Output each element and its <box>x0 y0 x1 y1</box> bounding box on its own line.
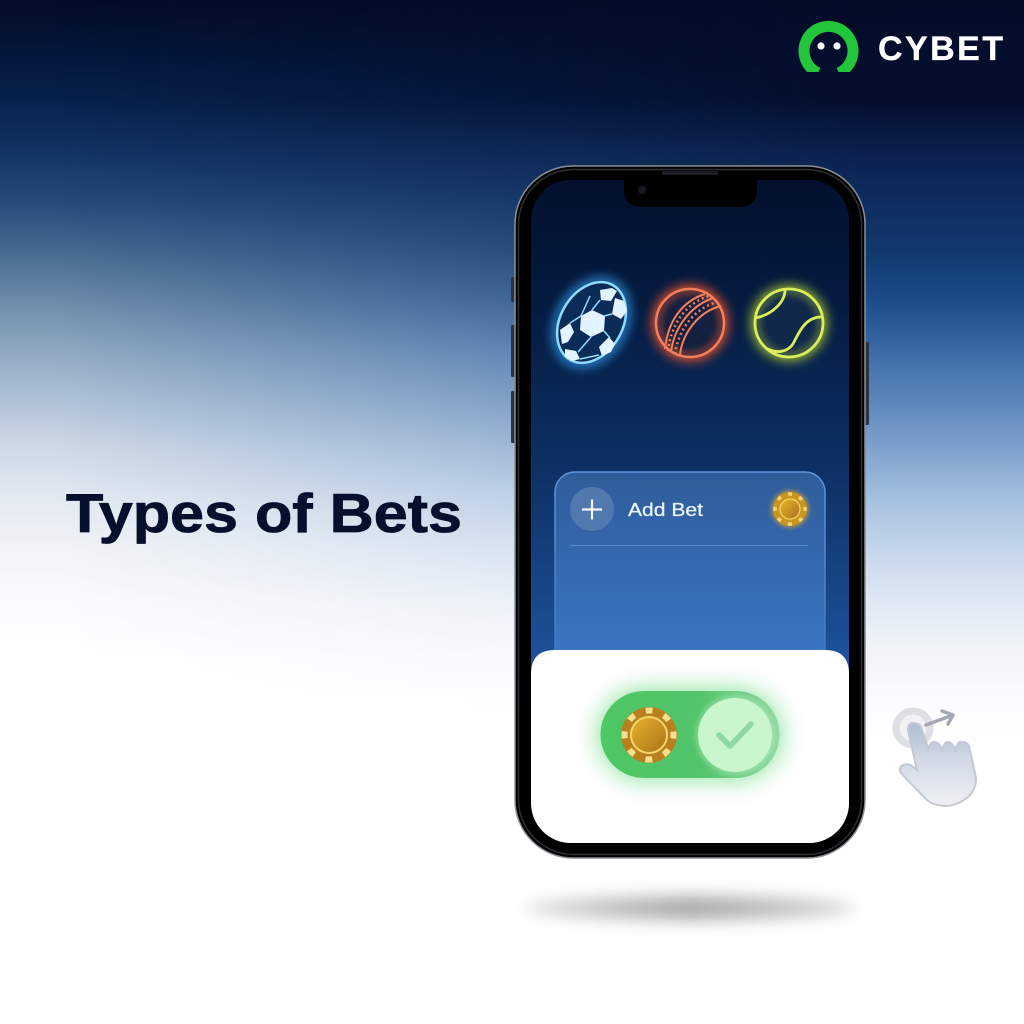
speaker <box>662 171 718 175</box>
icon: gold chip <box>621 707 677 763</box>
panel: white bottom sheet <box>531 650 849 843</box>
icon: small chip <box>771 490 809 528</box>
logo wordmark: CYBET <box>878 30 1003 68</box>
notch <box>624 178 757 207</box>
background gradient <box>0 0 1024 684</box>
camera <box>638 186 646 194</box>
title: Types of Bets <box>66 482 462 544</box>
icon: tennis ball <box>749 283 829 363</box>
phone body <box>515 166 865 858</box>
phone shadow <box>524 896 856 920</box>
icon: soccer ball <box>542 268 641 377</box>
toggle switch <box>600 691 780 778</box>
logo: CYBET <box>804 26 1003 73</box>
screen <box>531 180 849 843</box>
phone <box>511 166 869 858</box>
icon: swipe hand <box>896 711 976 806</box>
panel: add bet card <box>555 472 825 672</box>
toggle knob with check <box>695 695 775 775</box>
logo icon <box>804 26 853 73</box>
icon: plus button <box>570 487 614 531</box>
add bet label: Add Bet <box>628 500 703 520</box>
side buttons <box>511 277 869 443</box>
icon: cricket ball <box>650 283 730 363</box>
